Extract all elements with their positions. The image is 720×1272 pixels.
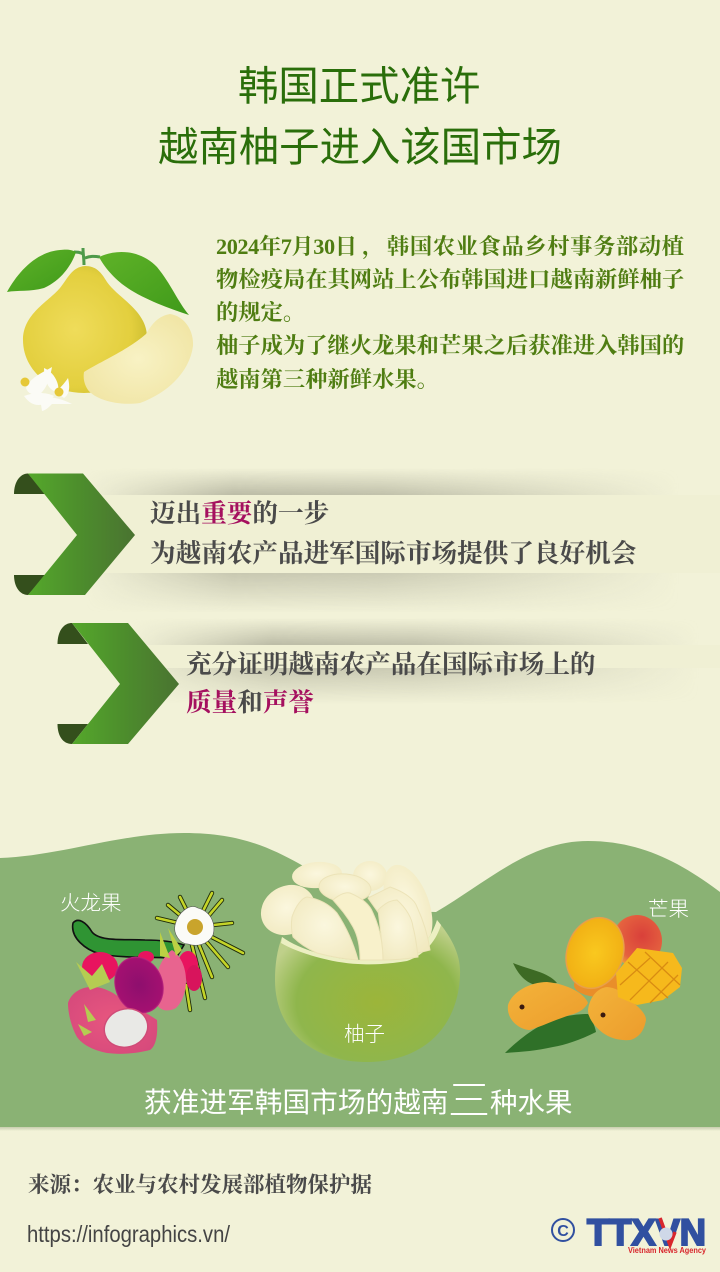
text block: intro: 韩国农业食品乡村事务部动植 <box>387 233 684 259</box>
pink fruit right <box>155 950 186 1010</box>
source line: 来源：农业与农村发展部植物保护据 <box>28 1173 372 1197</box>
back segments <box>291 860 343 890</box>
text block: intro: 2024年7月30日 <box>216 233 357 259</box>
red mango <box>612 915 662 967</box>
logo: TTXVN: C <box>557 1223 569 1240</box>
pomelo segment <box>84 314 193 404</box>
back orange <box>574 973 626 997</box>
caption: 获准进军韩国市场的越南 <box>144 1087 449 1118</box>
logo: TTXVN <box>552 1212 707 1255</box>
white flower <box>175 907 214 945</box>
caption <box>144 1077 572 1124</box>
band text <box>186 650 596 717</box>
panel: point one <box>14 472 636 606</box>
band shadow <box>150 622 655 698</box>
panel: three fruits <box>0 833 720 1127</box>
label: mango: 芒果 <box>648 898 689 921</box>
panel: point two <box>58 622 655 744</box>
front segments <box>368 887 430 953</box>
cut half <box>557 910 633 996</box>
caption: 种水果 <box>490 1087 572 1118</box>
text block: intro <box>216 233 684 392</box>
green wave <box>0 833 720 1127</box>
left mango <box>508 982 588 1030</box>
rind rim <box>281 920 441 964</box>
text block: intro: ， <box>362 234 384 260</box>
fruit scales <box>76 962 110 1036</box>
chevron ribbon <box>58 623 179 744</box>
small magenta fruits <box>82 952 118 982</box>
spiky flower leaves <box>157 893 243 1010</box>
wordmark: TTXVN <box>587 1212 706 1253</box>
lower leaf <box>505 1014 596 1053</box>
stem <box>74 248 100 265</box>
cubed mango <box>616 948 682 1005</box>
band text: 为越南农产品进军国际市场提供了良好机会 <box>150 538 637 568</box>
label: dragon fruit: 火龙果 <box>60 892 122 915</box>
purple half <box>106 949 172 1021</box>
right mango <box>588 987 646 1040</box>
copyright mark <box>552 1219 574 1241</box>
white half <box>99 1003 153 1053</box>
flower leaf fill <box>157 893 243 1010</box>
pink fruit left <box>68 987 157 1054</box>
green rind <box>275 920 460 1062</box>
cactus stem <box>73 920 184 958</box>
icon: opened pomelo <box>252 858 460 1062</box>
orange blossom <box>20 367 72 411</box>
text block: intro: 柚子成为了继火龙果和芒果之后获准进入韩国的 <box>216 333 684 358</box>
title: 韩国正式准许 <box>238 63 480 109</box>
label: pomelo: 柚子 <box>344 1023 385 1046</box>
title <box>158 63 562 170</box>
band shadow <box>106 472 632 606</box>
url: https://infographics.vn/ <box>27 1221 231 1247</box>
band text: 质量和声誉 <box>186 688 314 717</box>
text block: intro: 越南第三种新鲜水果。 <box>216 367 439 392</box>
band text: 迈出重要的一步 <box>150 499 329 528</box>
icon: pomelo with leaves and flower <box>7 248 193 411</box>
pomelo body <box>23 266 147 393</box>
left leaf <box>7 250 76 292</box>
band text <box>150 499 637 568</box>
upper leaf <box>513 963 557 985</box>
caption: 三 <box>448 1077 490 1124</box>
red V and globe <box>660 1218 675 1245</box>
chevron ribbon <box>14 474 135 595</box>
text block: intro: 的规定。 <box>216 300 305 325</box>
band text: 充分证明越南农产品在国际市场上的 <box>186 650 596 679</box>
icon: mangoes <box>505 910 682 1053</box>
tagline: Vietnam News Agency <box>628 1246 707 1255</box>
right leaf <box>99 252 189 315</box>
text block: intro: 物检疫局在其网站上公布韩国进口越南新鲜柚子 <box>216 267 684 292</box>
title: 越南柚子进入该国市场 <box>158 124 562 170</box>
band shadow under wave <box>0 1127 720 1131</box>
icon: dragon fruit <box>68 893 243 1054</box>
